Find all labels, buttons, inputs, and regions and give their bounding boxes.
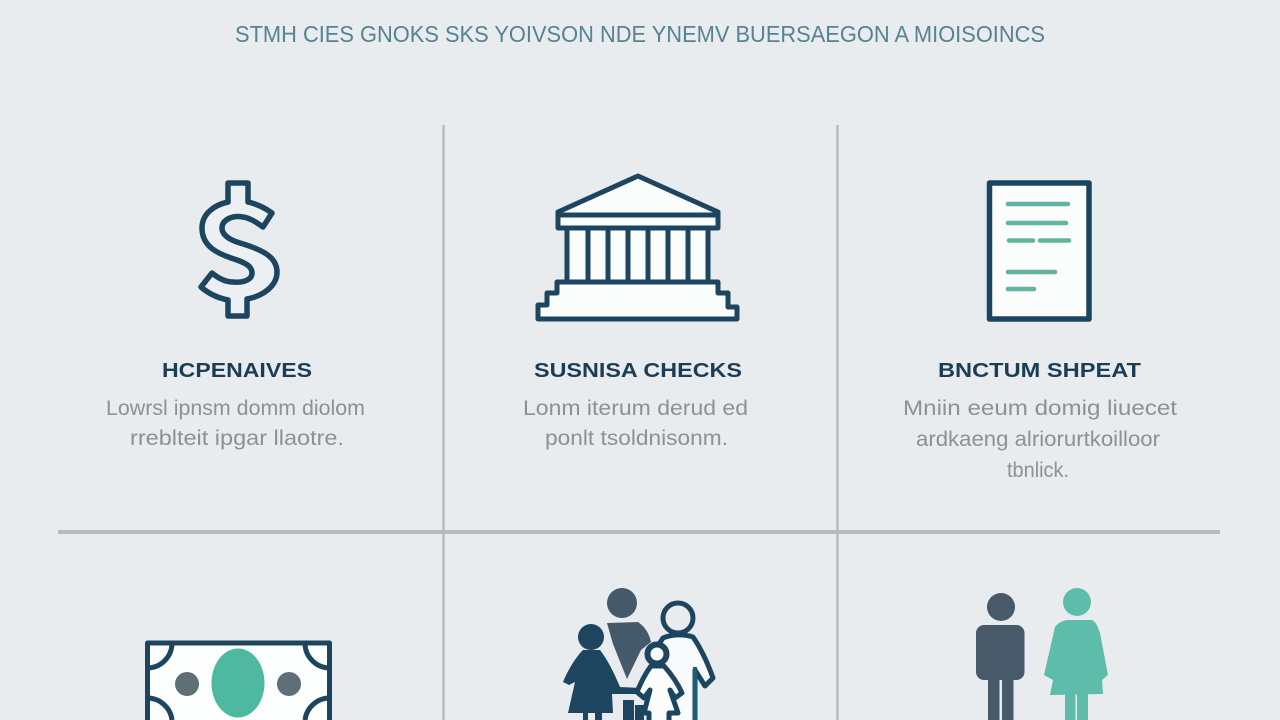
panel: bank bbox=[523, 176, 748, 450]
heading: HCPENAIVES bbox=[162, 360, 312, 382]
text block: rreblteit ipgar llaotre. bbox=[130, 427, 344, 450]
icon: document bbox=[990, 183, 1089, 319]
text block bbox=[106, 397, 365, 450]
panel: family bbox=[563, 588, 713, 720]
panel: couple bbox=[976, 588, 1108, 720]
title: STMH CIES GNOKS SKS YOIVSON NDE YNEMV BUERSAEGON A MIOISOINCS bbox=[235, 21, 1045, 47]
text block: Lowrsl ipnsm domm diolom bbox=[106, 397, 365, 420]
text block: Mniin eeum domig liuecet bbox=[903, 397, 1177, 420]
text block bbox=[523, 397, 748, 450]
text block: tbnlick. bbox=[1007, 459, 1069, 482]
text block bbox=[903, 397, 1177, 482]
icon: family bbox=[563, 588, 713, 720]
icon: banknote bbox=[147, 643, 330, 720]
panel: dollar bbox=[106, 183, 365, 450]
icon: dollar sign bbox=[201, 183, 277, 316]
heading: SUSNISA CHECKS bbox=[534, 360, 742, 382]
panel: banknote bbox=[147, 643, 330, 720]
icon: bank building bbox=[538, 176, 737, 319]
text block: ardkaeng alriorurtkoilloor bbox=[916, 428, 1160, 451]
text block: ponlt tsoldnisonm. bbox=[545, 427, 728, 450]
icon: woman bbox=[1044, 588, 1108, 720]
panel: document bbox=[903, 183, 1177, 482]
heading: BNCTUM SHPEAT bbox=[938, 360, 1141, 382]
icon: man bbox=[976, 593, 1024, 720]
text block: Lonm iterum derud ed bbox=[523, 397, 748, 420]
